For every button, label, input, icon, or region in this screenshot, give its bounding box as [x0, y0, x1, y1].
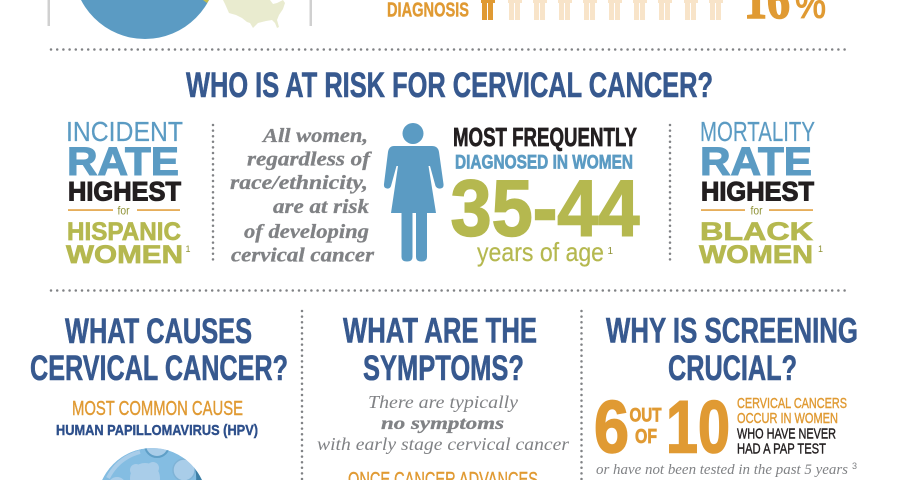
- heading: symptoms: [343, 312, 537, 388]
- panel: incident rate: for: [118, 204, 130, 218]
- text block: not tested in past five years: or have not been tested in the past 5 years: [596, 462, 848, 478]
- text block: never had a pap test: [737, 396, 847, 458]
- text block: never had a pap test: WHO HAVE NEVER: [737, 426, 836, 442]
- panel: most frequently diagnosed: [450, 122, 640, 267]
- panel: mortality rate: WOMEN: [699, 241, 813, 269]
- heading: screening: [606, 312, 858, 388]
- heading: what causes: [30, 312, 288, 388]
- most common cause label: MOST COMMON CAUSE: [72, 398, 243, 420]
- panel: mortality rate: for: [750, 204, 762, 218]
- pie chart: [73, 0, 217, 39]
- heading: screening: CRUCIAL?: [668, 349, 797, 388]
- panel: incident rate: RATE: [67, 140, 179, 184]
- panel: mortality rate: RATE: [700, 140, 812, 184]
- heading: what causes: WHAT CAUSES: [65, 312, 252, 351]
- text block: no symptoms early: no symptoms: [381, 413, 504, 433]
- pictogram: one in ten figures highlighted: [481, 0, 723, 20]
- icon: woman: [384, 123, 444, 262]
- icon: United States map: [223, 0, 285, 28]
- panel: most frequently diagnosed: MOST FREQUENTLY: [453, 122, 637, 152]
- text block: not tested in past five years: 3: [852, 461, 857, 471]
- text block: all women at risk: of developing: [244, 221, 369, 243]
- panel: mortality rate: [699, 116, 823, 269]
- icon: HPV virus: [102, 448, 202, 480]
- statistic: 6 out of 10: OF: [635, 426, 657, 448]
- heading: symptoms: WHAT ARE THE: [343, 312, 537, 350]
- panel: mortality rate: 1: [818, 244, 823, 254]
- text block: all women at risk: race/ethnicity,: [230, 172, 368, 194]
- text block: all women at risk: cervical cancer: [231, 244, 374, 266]
- text block: no symptoms early: There are typically: [368, 392, 518, 412]
- panel: most frequently diagnosed: 1: [608, 246, 614, 257]
- text block: all women at risk: [230, 125, 374, 266]
- heading: who is at risk: WHO IS AT RISK FOR CERVICAL CANCER?: [186, 66, 713, 105]
- text block: never had a pap test: CERVICAL CANCERS: [737, 396, 847, 412]
- statistic: 6 out of 10: 6: [594, 386, 629, 468]
- panel: mortality rate: MORTALITY: [700, 116, 815, 147]
- panel: incident rate: WOMEN: [66, 241, 183, 269]
- statistic: 16 percent: [744, 0, 826, 30]
- HPV label: HUMAN PAPILLOMAVIRUS (HPV): [56, 423, 258, 439]
- text block: all women at risk: are at risk: [273, 196, 369, 218]
- text block: never had a pap test: OCCUR IN WOMEN: [737, 411, 838, 427]
- panel: mortality rate: HIGHEST: [701, 176, 814, 206]
- panel: most frequently diagnosed: years of age: [477, 237, 604, 267]
- diagnosis label: DIAGNOSIS: [387, 0, 469, 22]
- text block: no symptoms early: [317, 392, 570, 454]
- panel: top statistics strip: [48, 0, 826, 39]
- text block: never had a pap test: HAD A PAP TEST: [737, 442, 826, 458]
- panel: most frequently diagnosed: DIAGNOSED IN WOMEN: [455, 152, 633, 174]
- text block: no symptoms early: with early stage cervical cancer: [317, 434, 570, 454]
- statistic: 6 out of 10: [594, 386, 730, 468]
- text block: all women at risk: regardless of: [247, 148, 373, 170]
- panel: most frequently diagnosed: 35-44: [450, 164, 640, 252]
- panel: what are the symptoms: [317, 312, 570, 480]
- panel: incident rate: INCIDENT: [66, 116, 183, 147]
- panel: incident rate: HISPANIC: [67, 218, 181, 246]
- panel: why is screening crucial: [594, 312, 858, 478]
- panel: mortality rate: BLACK: [700, 218, 813, 246]
- heading: what causes: CERVICAL CANCER?: [30, 349, 288, 388]
- text block: all women at risk: All women,: [261, 125, 368, 147]
- statistic: 6 out of 10: OUT: [630, 406, 662, 426]
- heading: symptoms: SYMPTOMS?: [363, 349, 524, 388]
- panel: incident rate: 1: [186, 244, 191, 254]
- panel: incident rate: HIGHEST: [68, 176, 181, 206]
- panel: what causes cervical cancer: [30, 312, 288, 480]
- statistic: 6 out of 10: 10: [666, 386, 730, 468]
- panel: incident rate: [66, 116, 191, 269]
